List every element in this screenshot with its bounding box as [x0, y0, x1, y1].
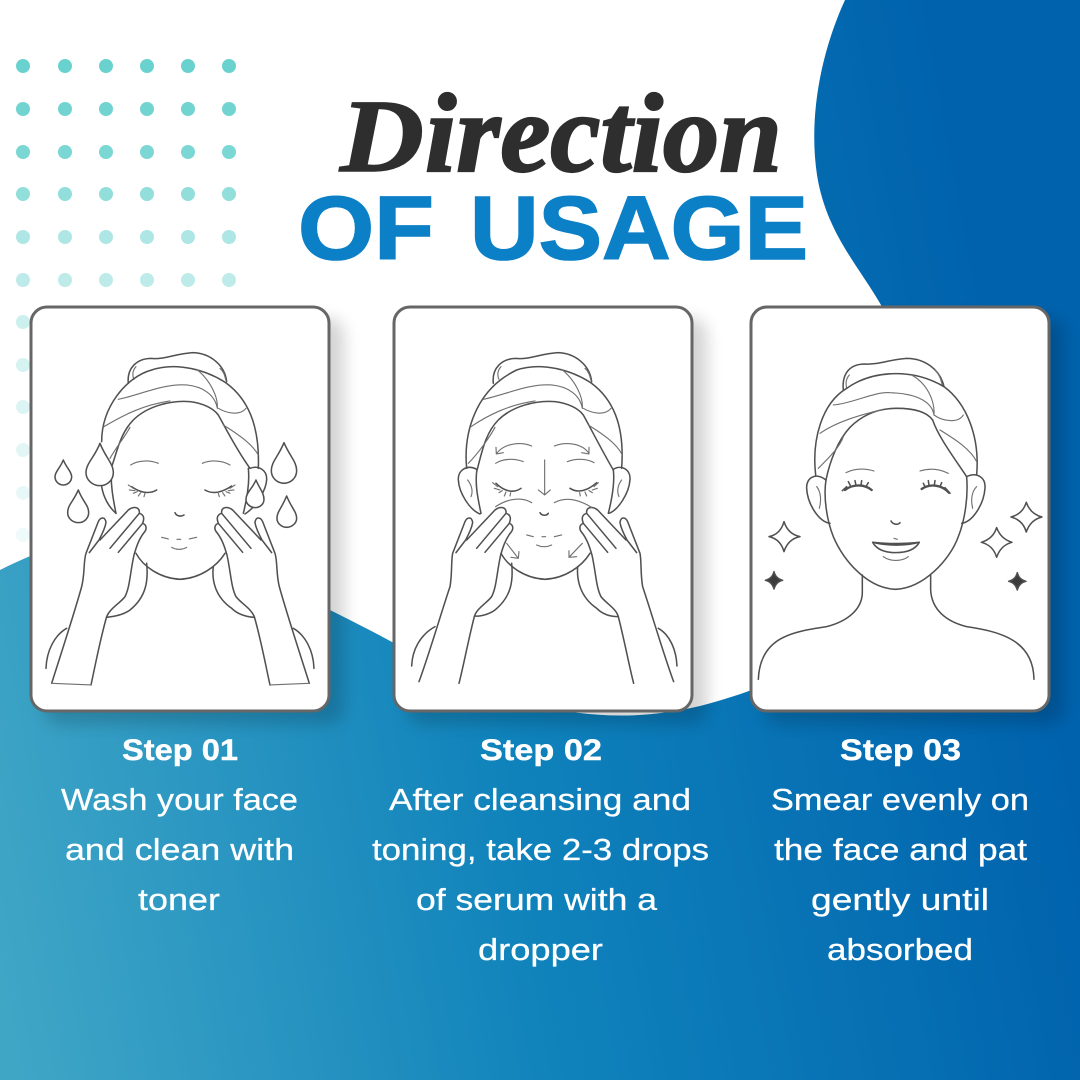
- text block: step 3: gently until: [811, 882, 989, 917]
- text block: step 1: Step 01: [122, 734, 238, 767]
- text block: step 1: Wash your face: [61, 782, 298, 817]
- text block: step 2: of serum with a: [416, 882, 658, 917]
- panel: step 3 card: [751, 307, 1049, 711]
- dot pattern: [16, 59, 236, 542]
- text block: step 2: [372, 734, 709, 967]
- text block: step 2: toning, take 2-3 drops: [372, 832, 709, 867]
- right hand and arm: [580, 508, 674, 683]
- panel: step 2 card: [394, 307, 692, 711]
- title: Direction: D: [339, 79, 424, 194]
- title: OF USAGE: OF: [298, 179, 434, 279]
- icon: massage arrows: [496, 444, 592, 558]
- text block: step 3: the face and pat: [774, 832, 1027, 867]
- icon: sparkles: [765, 502, 1042, 590]
- illustration: woman washing face: [46, 353, 314, 685]
- text block: step 2: dropper: [478, 932, 603, 967]
- text block: step 3: Step 03: [840, 734, 961, 767]
- text block: step 1: toner: [138, 882, 220, 917]
- text block: step 2: After cleansing and: [389, 782, 691, 817]
- card shadows: [44, 318, 1064, 724]
- text block: step 3: absorbed: [827, 932, 973, 967]
- title: Direction: irection: [425, 72, 782, 196]
- text block: step 2: Step 02: [480, 734, 602, 767]
- title: OF USAGE: USAGE: [470, 179, 808, 279]
- illustration: smiling woman with sparkles: [758, 358, 1042, 679]
- left hand and arm: [52, 508, 146, 685]
- text block: step 1: [61, 734, 298, 917]
- left hand and arm: [419, 508, 513, 683]
- smile: [873, 542, 919, 553]
- right hand and arm: [215, 508, 309, 685]
- text block: step 3: Smear evenly on: [771, 782, 1029, 817]
- panel: step 1 card: [31, 307, 329, 711]
- icon: water drops: [55, 443, 297, 527]
- text block: step 1: and clean with: [65, 832, 294, 867]
- illustration: woman applying serum with massage arrows: [412, 353, 677, 683]
- text block: step 3: [771, 734, 1029, 967]
- title: OF USAGE: [298, 179, 808, 279]
